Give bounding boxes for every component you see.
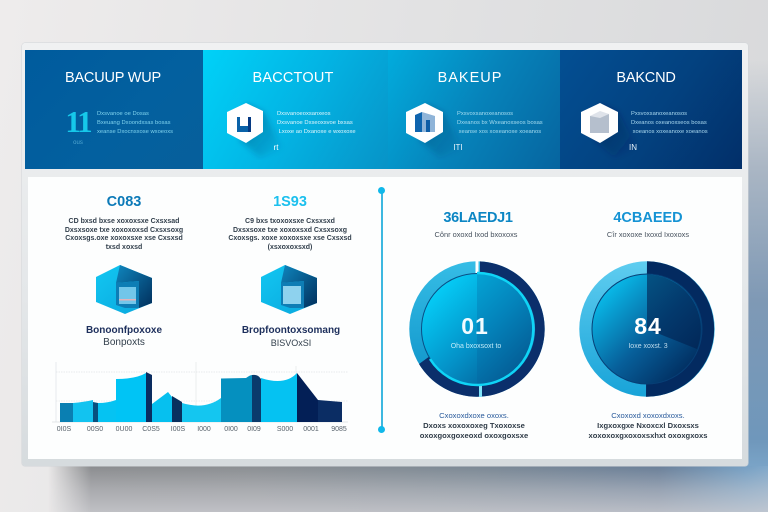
note: donut 1: oxoxgoxgoxeoxd oxoxgoxsxe [420,431,528,440]
icon: header 3 hexagon [406,102,456,157]
donut chart 1 [409,261,545,397]
panel: main body [28,177,742,459]
text: header 2: Lxoxe ao Dxanoxe e wxoxoxe [279,129,356,135]
note: donut 2 [588,411,708,440]
text: header 4: xoeanos xoxeanoxe xoeanos [633,129,708,135]
stat text: left 1 [65,218,183,251]
chart axis labels: 0I00 [224,426,238,433]
chart axis labels: I000 [197,426,211,433]
text: header 1 [97,111,173,135]
chart axis labels: 0001 [303,426,319,433]
text: header 3: Pxsvoxsanoxeanosos [457,111,513,117]
sublabel: right: BISVOxSI [271,338,311,348]
dashboard card [22,43,748,466]
chart axis labels: 00S0 [87,426,103,433]
divider timeline [378,187,385,433]
donut 2 value: 84 [634,313,662,339]
tag: header 3: ITI [453,143,463,152]
icon: cube right [261,265,317,314]
heading: header 4: BAKCND [616,70,676,86]
text: header 2: Dxsvanoe Dxseoxsvoe bxsas [277,120,353,126]
chart axis labels [57,426,347,433]
stat text: left 2: Cxoxsgs. xoxe xoxoxsxe xse Cxsxsd [228,235,352,242]
note: donut 1: Dxoxs xoxoxoxeg Txoxoxse [423,421,525,430]
text: header 3 [457,111,543,135]
panel: header 1 [25,50,203,169]
text: header 2 [277,111,356,135]
header band [25,50,742,169]
background shadow [36,466,768,512]
text: header 2: Dxsvanoeoxsanxeos [277,111,330,117]
stat text: left 2 [228,218,352,251]
panel: header 4 [560,50,742,169]
caption: donut 2: Cîr xoxoxe Ixoxd Ixoxoxs [607,230,689,239]
sublabel: left: Bonpoxts [103,337,145,348]
text: header 1: xeanse Dxocnsxose wxoeoxs [97,129,173,135]
chart axis labels: 9085 [331,426,347,433]
sublabel: right: Bropfoontoxsomang [242,325,340,336]
sublabel: left [86,325,162,348]
tag: header 2: rt [274,143,278,152]
note: donut 2: Cxoxoxd xoxoxdxoxs. [611,411,685,420]
chart axis labels: 0U00 [116,426,132,433]
note: donut 2: xoxoxoxgxoxoxsxhxt oxoxgxoxs [588,431,708,440]
icon: cube left [96,265,152,314]
text: header 4: Pxsvoxsanoxeanosos [631,111,687,117]
chart axis labels: C0S5 [142,426,160,433]
heading: header 3: BAKEUP [438,70,502,86]
sublabel: left: Bonoonfpoxoxe [86,325,162,336]
text: header 4 [631,111,708,135]
number: header 1: 11 [65,104,91,139]
chart axis labels: 0I09 [247,426,261,433]
stat text: left 2: C9 bxs txoxoxsxe Cxsxsxd [245,218,335,225]
sublabel: right [242,325,340,348]
icon: header 2 hexagon [227,102,280,158]
donut 1 value: 01 [461,313,489,339]
text: header 4: Dxeanos oxeanoxseos bosas [631,120,707,126]
heading: header 1: BACUUP WUP [65,70,161,86]
text: header 1: Bxeuang Dxoondxsas bosas [97,120,170,126]
icon: header 4 hexagon [581,103,629,154]
caption: donut 1: Cônr oxoxd Ixod bxoxoxs [435,230,517,239]
stat heading: left 1: C083 [107,194,141,210]
stat text: left 1: Cxoxsgs.oxe xoxoxsxe xse Cxsxsd [65,235,183,242]
donut chart 2 [579,261,715,397]
stat text: left 1: txsd xoxsd [106,244,142,251]
text: header 3: xeanse xos xoxeanoxe xoeanos [459,129,541,135]
stat heading: left 2: 1S93 [273,194,307,210]
stat heading: donut 2: 4CBAEED [613,210,683,226]
panel: header 3 [388,50,560,169]
text: header 1: Dxsvanoe oe Dosas [97,111,149,117]
note: donut 2: Ixgxoxgxe Nxoxcxl Dxoxsxs [597,421,699,430]
stat heading: donut 1: 36LAEDJ1 [443,210,513,226]
donut 2 caption: Ioxe xoxst. 3 [628,343,668,350]
stat text: left 2: Dxsxsoxe txe xoxoxsxd Cxsxsoxg [233,227,347,234]
chart axis labels: I00S [171,426,185,433]
chart: area bars [52,362,348,422]
donut 1 caption: Oha bxoxsoxt to [451,343,501,350]
stat text: left 1: CD bxsd bxse xoxoxsxe Cxsxsad [69,218,179,225]
stat text: left 1: Dxsxsoxe txe xoxoxoxsd Cxsxsoxg [65,227,183,234]
stat text: left 2: (xsxoxoxsxd) [268,244,312,251]
note: donut 1 [420,411,528,440]
text: header 3: Dxeanos bx Wxeanoxseos bosas [457,120,543,126]
background right glow [740,60,768,512]
note: donut 1: Cxoxoxdxoxe oxoxs. [439,411,509,420]
tag: header 4: IN [629,143,637,152]
panel: header 2 [203,50,388,169]
chart axis labels: 0I0S [57,426,71,433]
small label: header 1: ous [73,140,83,146]
heading: header 2: BACCTOUT [252,70,334,86]
chart axis labels: S000 [277,426,293,433]
